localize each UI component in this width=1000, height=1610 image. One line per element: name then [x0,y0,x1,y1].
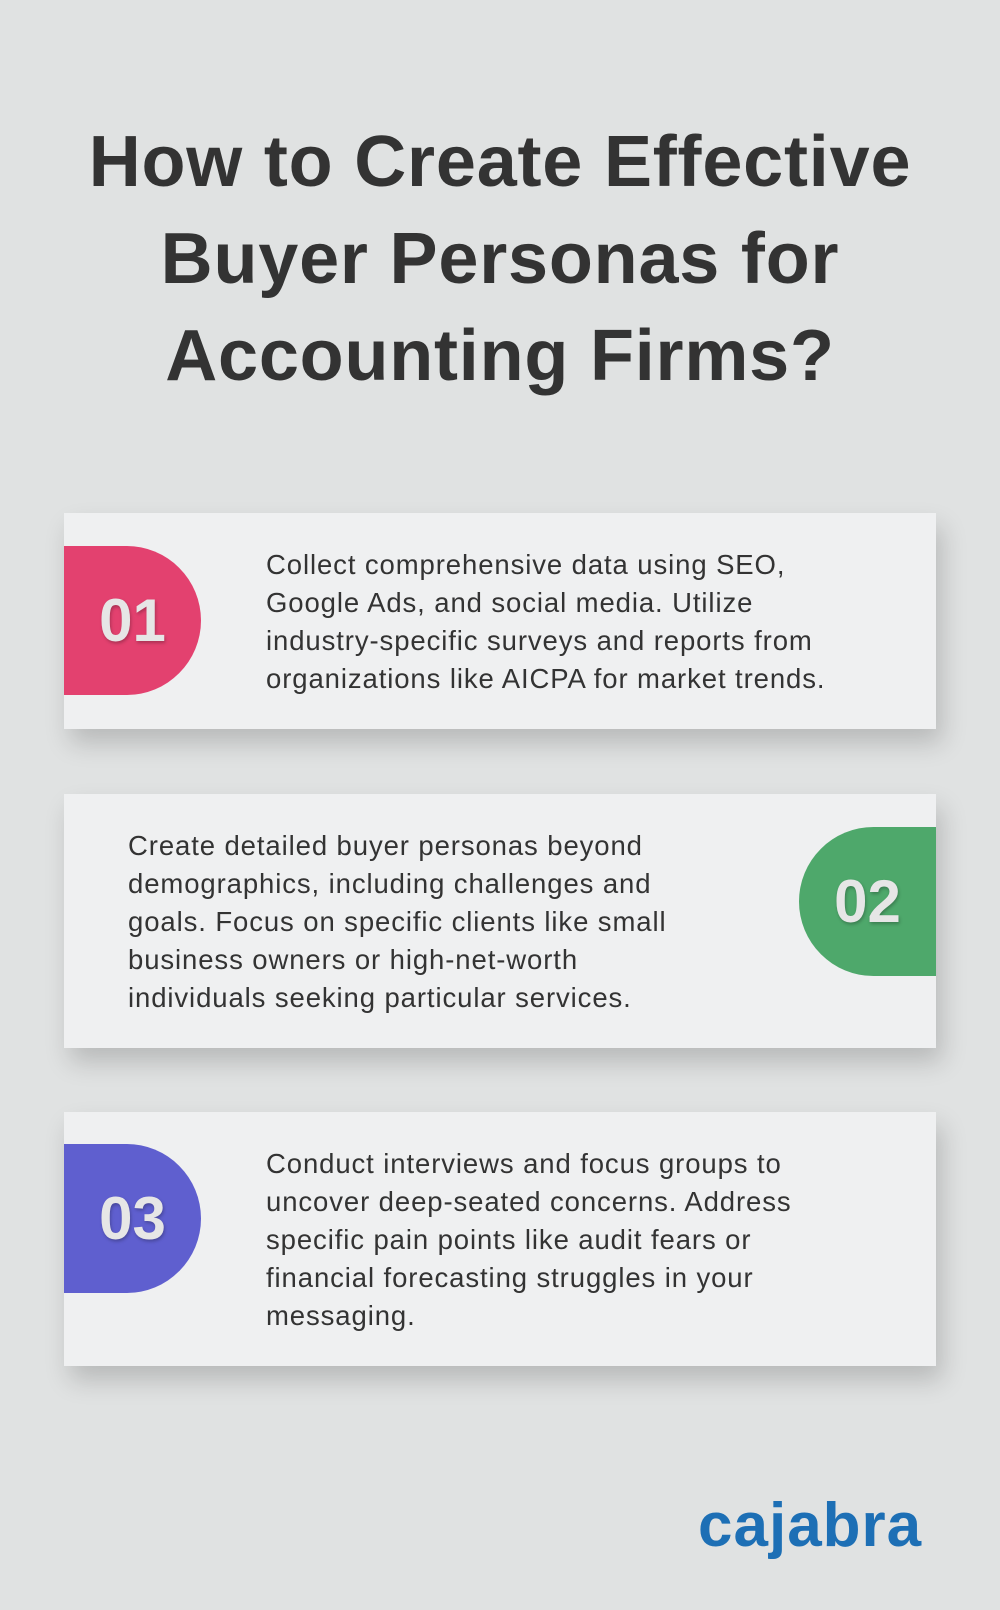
logo: cajabra [698,1491,922,1560]
text step 3 [266,1148,792,1331]
panel: step 3 [64,1112,936,1366]
badge 01 [64,546,201,695]
text step 1: industry-specific surveys and reports from [266,625,813,656]
text step 2: goals. Focus on specific clients like small [128,906,666,937]
badge 02: 02 [834,868,901,935]
text step 1: Collect comprehensive data using SEO, [266,549,785,580]
panel: step 1 [64,513,936,729]
text step 1 [266,549,825,694]
text step 3: Conduct interviews and focus groups to [266,1148,782,1179]
title: Buyer Personas for [161,219,839,299]
text step 2: demographics, including challenges and [128,868,651,899]
title: How to Create Effective [89,122,911,202]
text step 2 [128,830,666,1013]
text step 3: specific pain points like audit fears or [266,1224,751,1255]
text step 3: messaging. [266,1300,416,1331]
text step 2: Create detailed buyer personas beyond [128,830,643,861]
text step 1: organizations like AICPA for market trends. [266,663,825,694]
badge 03: 03 [99,1185,166,1252]
title [89,122,911,396]
text step 3: uncover deep-seated concerns. Address [266,1186,792,1217]
title: Accounting Firms? [165,316,835,396]
panel: step 2 [64,794,936,1048]
text step 1: Google Ads, and social media. Utilize [266,587,753,618]
text step 2: individuals seeking particular services. [128,982,632,1013]
badge 02 [799,827,936,976]
badge 03 [64,1144,201,1293]
badge 01: 01 [99,587,166,654]
text step 2: business owners or high-net-worth [128,944,578,975]
text step 3: financial forecasting struggles in your [266,1262,754,1293]
